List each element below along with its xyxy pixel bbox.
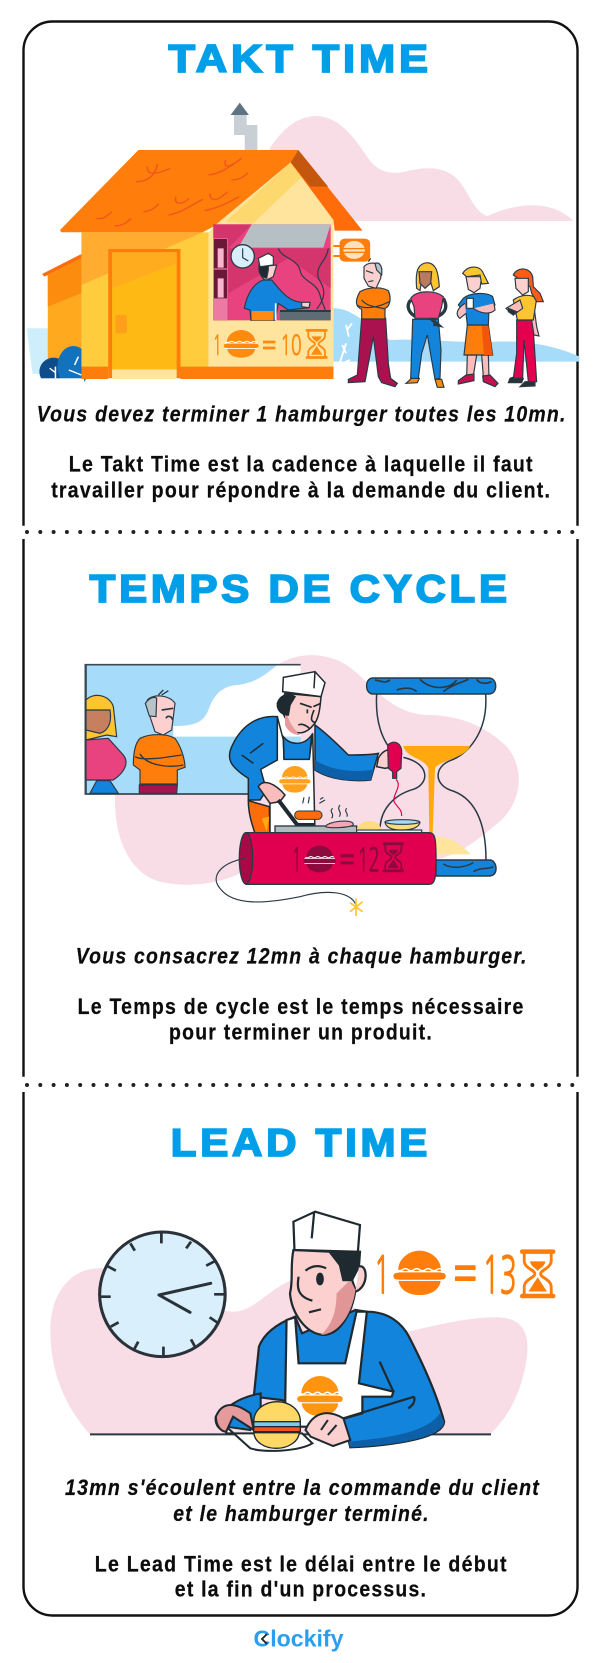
spark bbox=[350, 898, 363, 916]
hands and plate bbox=[216, 1393, 350, 1451]
house and landscape bbox=[27, 103, 579, 388]
burger equation bbox=[213, 329, 328, 360]
burger equation: 13 bbox=[482, 1249, 517, 1301]
grill bbox=[280, 310, 331, 320]
text: temps de cycle: Vous consacrez 12mn à chaque hamburger. bbox=[76, 943, 528, 968]
text: lead time bbox=[65, 1475, 540, 1602]
door bbox=[108, 249, 180, 379]
smoke bbox=[278, 248, 328, 310]
heading: takt time: TAKT TIME bbox=[168, 38, 432, 81]
burger equation: = bbox=[262, 331, 276, 359]
cook bbox=[254, 1212, 444, 1447]
burger equation: 1 bbox=[292, 844, 302, 877]
orange base bbox=[81, 367, 333, 379]
burger equation: 10 bbox=[280, 332, 302, 360]
white branches bbox=[337, 323, 352, 373]
wall clock bbox=[100, 1232, 225, 1357]
pink blob bbox=[50, 1268, 527, 1434]
trash can bbox=[27, 328, 49, 374]
window with customers bbox=[85, 665, 301, 794]
text: temps de cycle: pour terminer un produit. bbox=[169, 1019, 433, 1044]
text: lead time: 13mn s'écoulent entre la commande du client bbox=[65, 1475, 540, 1500]
hourglass bbox=[367, 678, 496, 876]
burger equation: 12 bbox=[357, 844, 380, 877]
gable wall bbox=[208, 162, 333, 367]
text: takt time: travailler pour répondre à la demande du client. bbox=[51, 478, 551, 502]
roof bbox=[60, 150, 298, 232]
burger equation bbox=[292, 842, 404, 877]
burger equation: = bbox=[339, 842, 355, 875]
illustration: burger house with queue bbox=[27, 103, 579, 388]
blue ground bbox=[333, 308, 579, 362]
panel: temps de cycle bbox=[76, 568, 528, 1044]
burger patty bbox=[295, 811, 322, 819]
person: boy bbox=[457, 267, 498, 387]
burger bbox=[254, 1402, 300, 1448]
person: girl bbox=[506, 269, 543, 387]
fuse bbox=[216, 858, 356, 905]
hanging burger sign bbox=[333, 239, 370, 262]
griddle plate bbox=[275, 826, 357, 836]
burger equation: 1 bbox=[213, 332, 222, 360]
apron burger bbox=[279, 766, 310, 793]
roof shingles bbox=[96, 158, 248, 226]
cook bbox=[244, 253, 310, 320]
heading: temps de cycle: TEMPS DE CYCLE bbox=[90, 568, 511, 611]
chimney bbox=[234, 115, 257, 155]
cooking steam marks bbox=[303, 797, 347, 818]
chimney cap bbox=[231, 103, 249, 115]
burger equation bbox=[374, 1246, 555, 1301]
spatula bbox=[278, 800, 314, 825]
tray with ingredients bbox=[326, 820, 422, 836]
logo: clockify: Clockify bbox=[254, 1626, 344, 1652]
pink hill background bbox=[270, 116, 574, 221]
wall clock bbox=[231, 245, 254, 268]
heading: lead time: LEAD TIME bbox=[171, 1122, 431, 1165]
window wall bbox=[213, 224, 331, 320]
section divider 2 bbox=[27, 1083, 573, 1087]
awning bbox=[238, 224, 331, 248]
person: old man bbox=[348, 258, 397, 387]
house front wall bbox=[81, 232, 213, 367]
serving window with cook bbox=[213, 224, 331, 360]
section divider 1 bbox=[27, 530, 573, 534]
text: takt time bbox=[37, 402, 567, 502]
text: lead time: et la fin d'un processus. bbox=[175, 1577, 427, 1602]
pink blob bbox=[115, 655, 519, 885]
text: temps de cycle: Le Temps de cycle est le temps nécessaire bbox=[78, 994, 525, 1019]
text: takt time: Le Takt Time est la cadence à laquelle il faut bbox=[69, 452, 534, 477]
illustration: cook with finished burger bbox=[50, 1212, 555, 1451]
burger equation: = bbox=[453, 1246, 477, 1298]
text: temps de cycle bbox=[76, 943, 528, 1044]
text: lead time: et le hamburger terminé. bbox=[173, 1501, 430, 1526]
bushes bbox=[38, 346, 89, 388]
customer: old man bbox=[133, 690, 185, 793]
side shed bbox=[42, 254, 81, 367]
person: woman in pink bbox=[406, 263, 446, 387]
ketchup bottle bbox=[388, 742, 402, 816]
panel: takt time bbox=[27, 38, 579, 502]
counter line bbox=[90, 1431, 491, 1437]
panel: lead time bbox=[50, 1122, 555, 1602]
queue of customers bbox=[348, 258, 543, 387]
apron burger bbox=[297, 1376, 343, 1416]
cook bbox=[229, 672, 402, 833]
roof right edge bbox=[291, 150, 363, 231]
burger equation: 1 bbox=[374, 1249, 390, 1301]
customer: woman bbox=[86, 695, 126, 793]
dynamite bbox=[239, 833, 436, 884]
text: lead time: Le Lead Time est le délai entre le début bbox=[95, 1552, 508, 1577]
illustration: cook under pressure bbox=[85, 655, 519, 916]
